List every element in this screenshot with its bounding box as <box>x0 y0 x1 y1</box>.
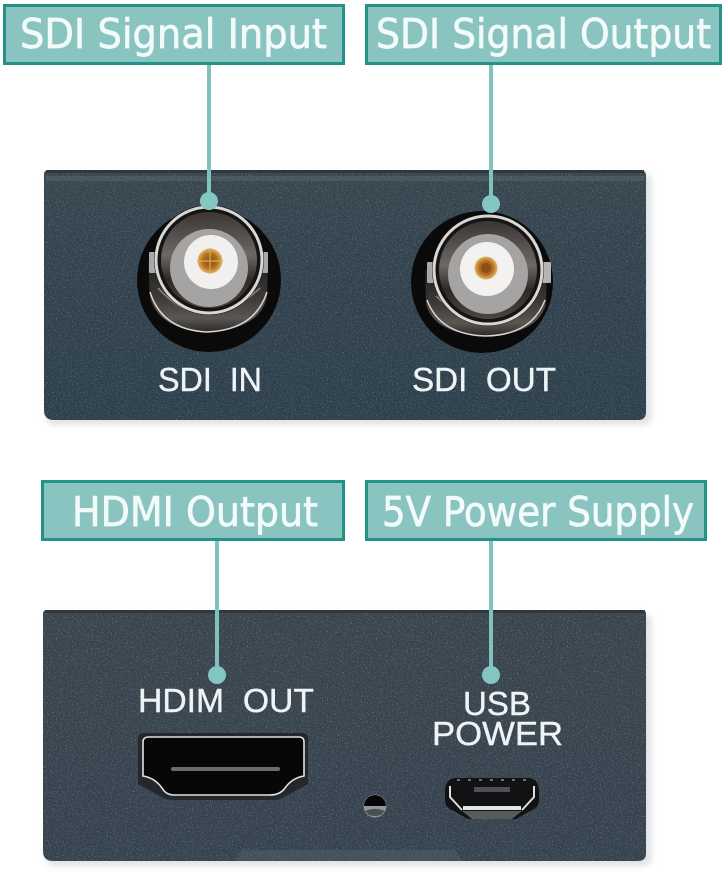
callout: HDMI Output: HDMI Output <box>72 488 318 536</box>
text: POWER port marking: POWER <box>432 715 563 752</box>
icon: SDI output BNC connector <box>411 211 553 353</box>
icon: SDI input BNC connector <box>137 205 281 352</box>
text: HDIM OUT port marking: HDIM OUT <box>138 682 314 719</box>
icon: HDMI port <box>138 733 308 800</box>
callout: 5V Power Supply <box>366 482 706 684</box>
icon: reset pinhole <box>364 794 386 818</box>
callout: SDI Signal Output <box>366 6 720 213</box>
callout: SDI Signal Input: SDI Signal Input <box>20 10 327 58</box>
callout: SDI Signal Input <box>4 6 344 210</box>
text: USB port marking: USB <box>463 685 531 722</box>
panel: SDI connector plate <box>44 170 652 425</box>
text: SDI IN port marking: SDI IN <box>158 361 262 398</box>
callout: HDMI Output <box>42 482 344 684</box>
panel: HDMI and USB connector plate <box>43 610 652 866</box>
icon: micro USB port <box>445 778 539 819</box>
text: SDI OUT port marking: SDI OUT <box>412 361 556 398</box>
callout: 5V Power Supply: 5V Power Supply <box>382 488 694 536</box>
